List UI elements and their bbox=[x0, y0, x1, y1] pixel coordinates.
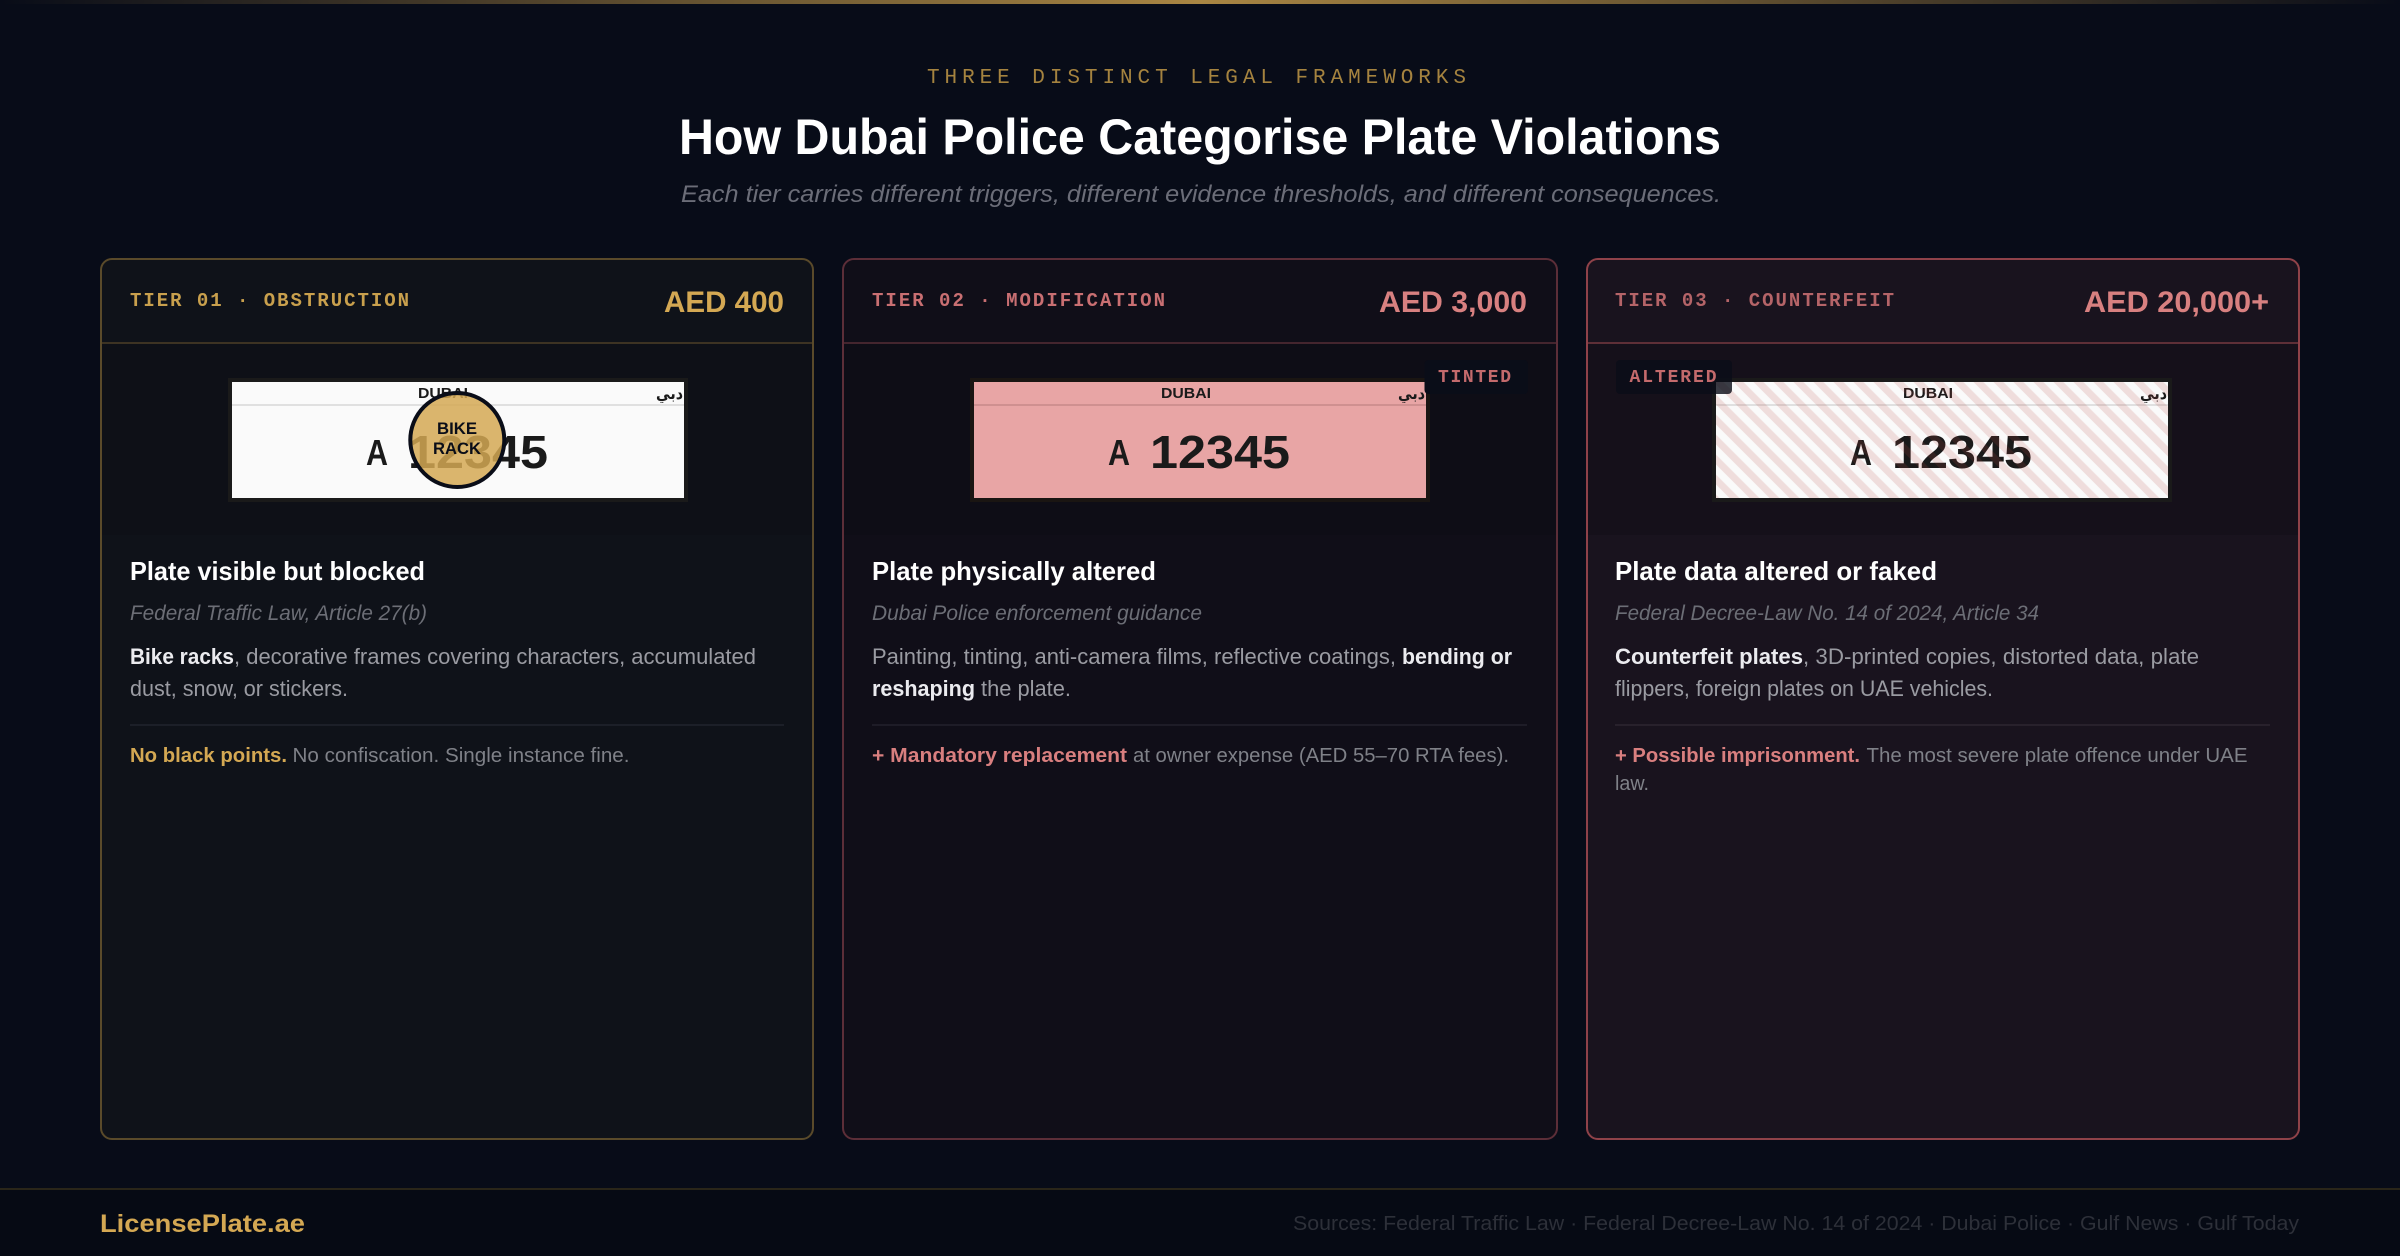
tier 02 description: bending or bbox=[1402, 644, 1512, 669]
tier 02 consequence note: + Mandatory replacement bbox=[872, 745, 1127, 767]
panel: tier 02 modification bbox=[842, 258, 1558, 1140]
bike rack obstruction: RACK bbox=[433, 439, 482, 458]
tier 03 description: , 3D-printed copies, distorted data, plate bbox=[1803, 644, 2199, 669]
panel: tier 03 counterfeit bbox=[1586, 258, 2300, 1140]
plate illustration tinted: A bbox=[1108, 432, 1130, 473]
tier label: TIER 01 · OBSTRUCTION bbox=[130, 290, 409, 312]
fine amount: AED 20,000+ bbox=[2084, 286, 2269, 319]
tier 02 description: Painting, tinting, anti-camera films, reflective coatings, bbox=[872, 644, 1396, 669]
plate illustration with bike rack bbox=[228, 378, 688, 502]
tier 01 consequence note: No black points. bbox=[130, 745, 287, 767]
tier 01 heading: Plate visible but blocked bbox=[130, 556, 425, 586]
tier 01 description: dust, snow, or stickers. bbox=[130, 676, 348, 701]
altered badge: ALTERED bbox=[1630, 368, 1717, 388]
tier 03 consequence note: + Possible imprisonment. bbox=[1615, 745, 1860, 767]
tier label: TIER 03 · COUNTERFEIT bbox=[1615, 290, 1894, 312]
tinted badge: TINTED bbox=[1438, 368, 1511, 388]
fine amount: AED 400 bbox=[664, 286, 784, 319]
tier 03 consequence note: The most severe plate offence under UAE bbox=[1866, 745, 2248, 767]
tier label: TIER 02 · MODIFICATION bbox=[872, 290, 1165, 312]
tier 03 description bbox=[1615, 644, 2199, 701]
brand: LicensePlate.ae bbox=[100, 1210, 305, 1238]
bike rack obstruction: BIKE bbox=[437, 419, 477, 438]
tier 01 description bbox=[130, 644, 756, 701]
bike rack obstruction bbox=[410, 393, 504, 487]
tier 01 consequence note bbox=[130, 745, 630, 767]
tier 03 description: Counterfeit plates bbox=[1615, 644, 1803, 669]
plate illustration with bike rack: DUBAI bbox=[418, 385, 468, 402]
tier 03 heading: Plate data altered or faked bbox=[1615, 556, 1937, 586]
tier 02 consequence note bbox=[872, 745, 1509, 767]
subtitle: Each tier carries different triggers, different evidence thresholds, and different consequences. bbox=[681, 181, 1721, 208]
eyebrow: THREE DISTINCT LEGAL FRAMEWORKS bbox=[927, 67, 1466, 90]
fine amount: AED 3,000 bbox=[1379, 286, 1527, 319]
title: How Dubai Police Categorise Plate Violations bbox=[679, 109, 1721, 165]
plate illustration with bike rack: A bbox=[366, 432, 388, 473]
header bbox=[679, 67, 1721, 208]
panel: tier 01 obstruction bbox=[100, 258, 814, 1140]
plate illustration altered: 12345 bbox=[1892, 426, 2032, 478]
plate illustration tinted bbox=[970, 360, 1528, 502]
tier 02 description bbox=[872, 644, 1512, 701]
tier 02 description: reshaping bbox=[872, 676, 975, 701]
plate illustration tinted: 12345 bbox=[1150, 426, 1290, 478]
tier 01 description: Bike racks bbox=[130, 644, 234, 669]
plate illustration altered bbox=[1616, 360, 2172, 502]
top accent bar bbox=[0, 0, 2400, 4]
tier 03 citation: Federal Decree-Law No. 14 of 2024, Article 34 bbox=[1615, 602, 2039, 625]
sources: Sources: Federal Traffic Law · Federal Decree-Law No. 14 of 2024 · Dubai Police · Gulf News · Gulf Today bbox=[1293, 1213, 2299, 1235]
tier 01 consequence note: No confiscation. Single instance fine. bbox=[292, 745, 630, 767]
plate illustration with bike rack: 12345 bbox=[408, 426, 548, 478]
plate illustration tinted: دبي bbox=[1398, 384, 1425, 404]
tier 02 heading: Plate physically altered bbox=[872, 556, 1156, 586]
tier 03 description: flippers, foreign plates on UAE vehicles. bbox=[1615, 676, 1993, 701]
plate illustration tinted: DUBAI bbox=[1161, 385, 1211, 402]
tier 03 consequence note bbox=[1615, 745, 2248, 795]
altered badge bbox=[1616, 360, 1732, 394]
plate illustration with bike rack: دبي bbox=[656, 384, 683, 404]
tier 01 citation: Federal Traffic Law, Article 27(b) bbox=[130, 602, 427, 625]
tier 02 citation: Dubai Police enforcement guidance bbox=[872, 602, 1202, 625]
tier 03 consequence note: law. bbox=[1615, 773, 1649, 795]
tier 02 consequence note: at owner expense (AED 55–70 RTA fees). bbox=[1133, 745, 1509, 767]
plate illustration altered: DUBAI bbox=[1903, 385, 1953, 402]
tinted badge bbox=[1424, 360, 1528, 394]
tier 01 description: , decorative frames covering characters, accumulated bbox=[234, 644, 756, 669]
plate illustration altered: دبي bbox=[2140, 384, 2167, 404]
footer bbox=[0, 1188, 2400, 1256]
plate illustration altered: A bbox=[1850, 432, 1872, 473]
tier 02 description: the plate. bbox=[981, 676, 1071, 701]
